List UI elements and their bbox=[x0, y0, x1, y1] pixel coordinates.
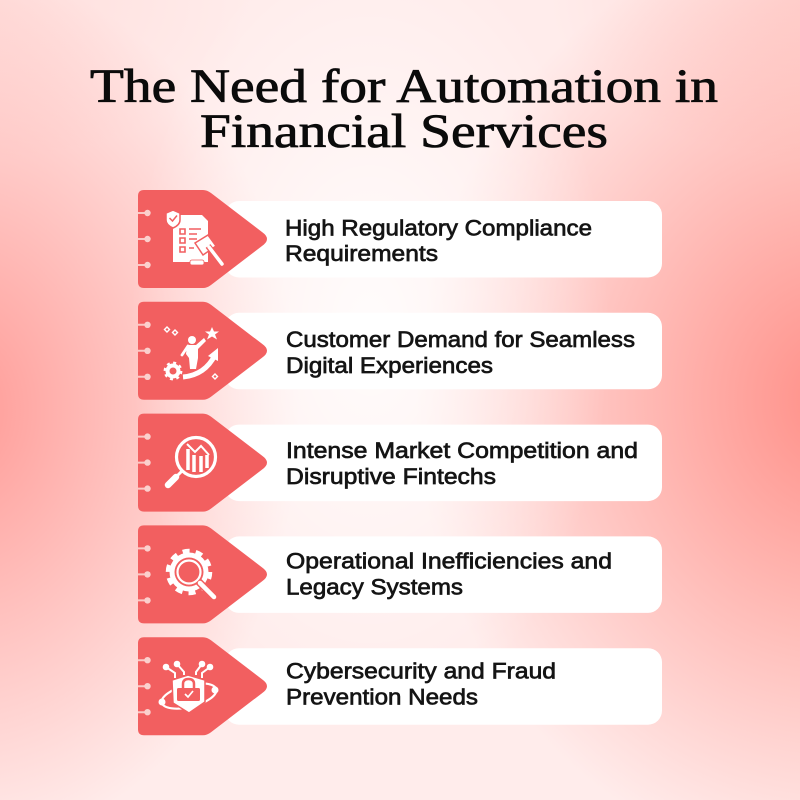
arrow tag: customer demand bbox=[138, 302, 267, 400]
binder dots bbox=[138, 545, 151, 604]
binder dots bbox=[138, 433, 151, 492]
text card: cybersecurity bbox=[225, 648, 662, 725]
icon: gear with magnifier bbox=[168, 551, 214, 597]
panel: operational inefficiencies bbox=[138, 525, 662, 623]
icon: climbing figure with star and gear bbox=[164, 327, 219, 379]
panel: customer demand bbox=[138, 302, 662, 400]
arrow tag: market competition bbox=[138, 414, 267, 512]
panel: regulatory compliance bbox=[138, 190, 662, 288]
text card: operational inefficiencies bbox=[225, 536, 662, 613]
text card: customer demand: Digital Experiences bbox=[286, 353, 493, 378]
text card: market competition: Intense Market Competition and bbox=[286, 438, 638, 463]
title: Financial Services bbox=[200, 105, 608, 158]
binder dots bbox=[138, 657, 151, 715]
panel: market competition bbox=[138, 414, 662, 512]
icon: magnifier over chart bbox=[168, 438, 216, 485]
binder dots bbox=[138, 322, 151, 380]
arrow tag: regulatory compliance bbox=[138, 190, 267, 288]
icon: circuit shield with padlock bbox=[158, 661, 219, 713]
text card: regulatory compliance: Requirements bbox=[285, 241, 438, 266]
text card: market competition bbox=[225, 425, 662, 501]
panel: cybersecurity bbox=[138, 637, 662, 735]
text card: regulatory compliance: High Regulatory Compliance bbox=[285, 216, 592, 240]
text card: customer demand bbox=[225, 313, 662, 389]
arrow tag: cybersecurity bbox=[138, 637, 267, 735]
title bbox=[90, 60, 718, 158]
title: The Need for Automation in bbox=[90, 60, 718, 113]
text card: cybersecurity: Prevention Needs bbox=[286, 684, 478, 710]
text card: cybersecurity: Cybersecurity and Fraud bbox=[286, 658, 556, 684]
text card: regulatory compliance bbox=[225, 201, 662, 278]
text card: customer demand: Customer Demand for Seamless bbox=[286, 327, 635, 352]
binder dots bbox=[138, 210, 151, 268]
text card: market competition: Disruptive Fintechs bbox=[286, 464, 496, 489]
text card: operational inefficiencies: Operational Inefficiencies and bbox=[286, 548, 612, 574]
icon: checklist with shield and gavel bbox=[166, 210, 222, 265]
arrow tag: operational inefficiencies bbox=[138, 525, 267, 623]
text card: operational inefficiencies: Legacy Systems bbox=[286, 574, 463, 600]
